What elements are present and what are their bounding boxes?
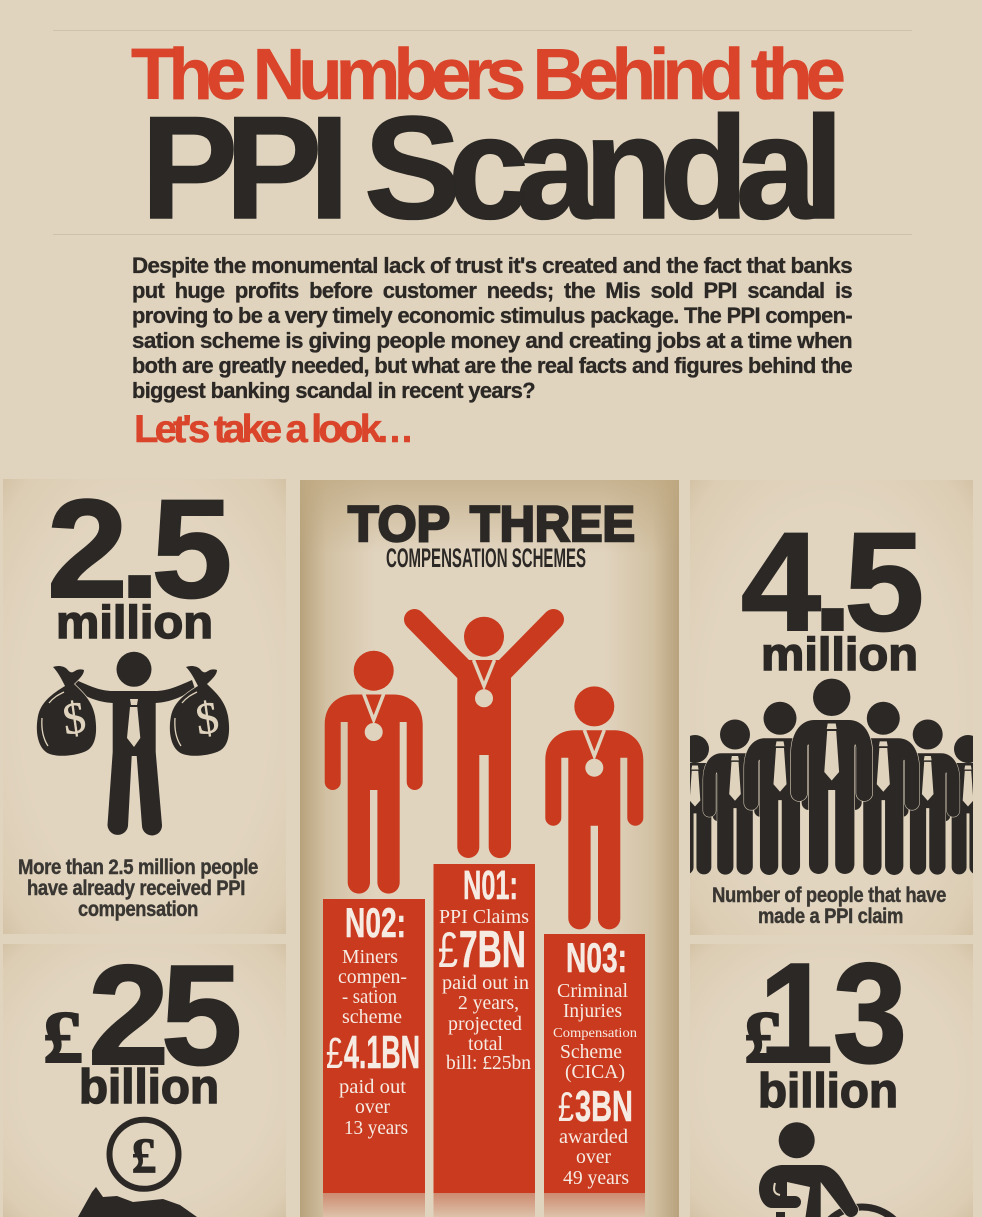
caption: compensation (78, 898, 198, 921)
podium: second place: Miners (342, 946, 398, 968)
pound sign: £ (43, 997, 83, 1079)
podium: third place (544, 934, 645, 1217)
title (131, 35, 844, 249)
podium: second place: scheme (342, 1006, 402, 1028)
podium: first place: bill: £25bn (446, 1052, 531, 1074)
unit: million (761, 628, 918, 680)
heading: THREE (470, 496, 635, 552)
podium: third place: (CICA) (565, 1061, 625, 1083)
icon: man holding money bags: $ (193, 692, 222, 744)
caption: More than 2.5 million people (18, 856, 258, 879)
intro paragraph: proving to be a very timely economic stimulus package. The PPI compen- (132, 303, 852, 328)
podium: second place: 13 years (344, 1117, 408, 1139)
figure: second place (325, 651, 423, 894)
title line one: The Numbers Behind the (131, 35, 844, 115)
podium: second place: paid out (339, 1076, 406, 1098)
podium: second place: - sation (342, 986, 397, 1008)
caption: made a PPI claim (758, 905, 903, 928)
podium: first place: 2 years, (458, 992, 519, 1014)
podium: second place: N02: (345, 899, 406, 946)
podium: third place: 3BN (575, 1082, 633, 1131)
figure: first place (414, 617, 554, 858)
caption (18, 856, 258, 921)
icon: man holding money bags (37, 652, 229, 836)
unit: million (56, 596, 213, 648)
figure: third place (545, 686, 643, 929)
panel: 2.5 million (3, 470, 286, 934)
intro paragraph: biggest banking scandal in recent years? (132, 378, 535, 403)
unit: billion (758, 1065, 898, 1118)
big number: 25 (88, 936, 239, 1095)
panel: 13 billion (690, 934, 973, 1217)
caption: Number of people that have (712, 884, 946, 907)
podium: second place (323, 899, 425, 1217)
podium: first place: total (468, 1033, 503, 1055)
intro paragraph: Despite the monumental lack of trust it's created and the fact that banks (132, 253, 852, 278)
podium: third place: Compensation (553, 1026, 637, 1041)
podium: first place (434, 862, 535, 1217)
podium: first place: PPI Claims (439, 906, 529, 928)
podium: third place: Criminal (557, 980, 628, 1002)
podium: first place: projected (448, 1013, 522, 1035)
heading: TOP (348, 496, 450, 552)
podium: first place: paid out in (442, 972, 529, 994)
panel: 25 billion (3, 936, 286, 1217)
intro paragraph: put huge profits before customer needs; the Mis sold PPI scandal is (132, 278, 852, 303)
intro paragraph: sation scheme is giving people money and creating jobs at a time when (132, 328, 852, 353)
panel: 4.5 million (690, 480, 973, 935)
podium: first place: N01: (463, 862, 518, 908)
podium: third place: N03: (566, 934, 627, 981)
podium: third place: awarded (559, 1126, 628, 1148)
podium: first place: 7BN (459, 921, 526, 979)
podium: third place: Scheme (560, 1041, 622, 1063)
big number: 4.5 (741, 503, 920, 660)
icon: man holding money bags: $ (60, 692, 89, 744)
call to action: Let's take a look (134, 408, 382, 451)
icon: coin over hand: £ (132, 1127, 156, 1183)
title line two: PPI Scandal (141, 86, 834, 249)
podium: second place: compen- (338, 966, 407, 988)
caption (712, 884, 946, 928)
heading (348, 496, 635, 573)
podium: third place: £ (558, 1083, 574, 1130)
intro paragraph: both are greatly needed, but what are the real facts and figures behind the (132, 353, 852, 378)
big number: 13 (759, 934, 907, 1093)
icon: crowd of people (690, 678, 973, 875)
podium: third place: Injuries (563, 1000, 622, 1022)
podium: second place: over (355, 1096, 390, 1118)
intro paragraph (132, 253, 852, 403)
panel: top three compensation schemes (300, 480, 679, 1217)
heading: COMPENSATION SCHEMES (386, 543, 586, 573)
pound sign: £ (744, 997, 783, 1079)
podium: third place: over (576, 1146, 611, 1168)
unit: billion (79, 1061, 219, 1114)
podium: second place: £ (326, 1029, 343, 1078)
caption: have already received PPI (27, 877, 245, 900)
podium: third place: 49 years (563, 1167, 629, 1189)
icon: coin over hand (78, 1120, 197, 1217)
call to action: … (376, 408, 414, 451)
big number: 2.5 (47, 470, 228, 627)
podium: first place: £ (438, 922, 458, 978)
icon: person in wheelchair (759, 1122, 896, 1217)
podium: second place: 4.1BN (344, 1026, 420, 1078)
